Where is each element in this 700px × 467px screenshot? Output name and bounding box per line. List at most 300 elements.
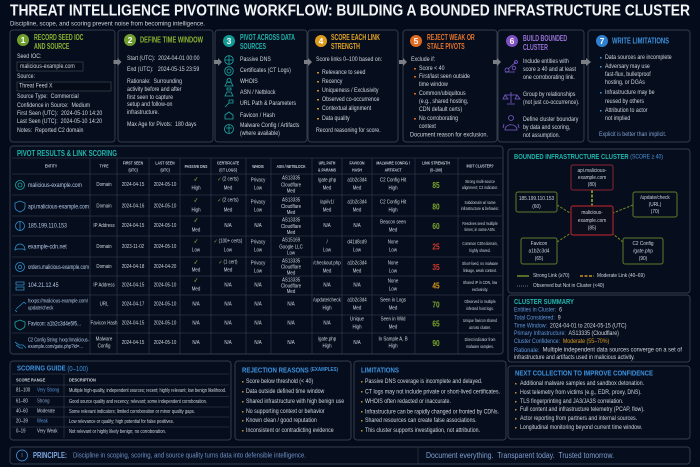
step 1 fields: malicious-example.com xyxy=(20,63,75,70)
table url and favicon columns: Med xyxy=(323,207,332,214)
limitations list: Shared resources can create false associations. xyxy=(365,418,477,424)
table whois and asn columns: Low xyxy=(254,185,262,192)
scoring table: SCORE RANGE xyxy=(16,377,45,383)
scoring table: Low relevance or quality; high potential for false positives. xyxy=(69,419,174,425)
table type and date columns: IP Address xyxy=(93,282,115,289)
scoring table grid xyxy=(12,374,229,438)
table url and favicon columns: Med xyxy=(353,268,362,275)
table passive dns and certificate columns: ✓ xyxy=(194,259,198,267)
step 1 fields: Confidence in Source: Medium xyxy=(17,103,90,109)
step 7 heading: WRITE LIMITATIONS xyxy=(612,36,669,46)
summary details: Entities in Cluster: 6 xyxy=(514,307,562,314)
table header row: (UTC) xyxy=(128,167,138,173)
table url and favicon columns: Med xyxy=(353,305,362,312)
table notes column: across cluster. xyxy=(469,326,491,330)
table entity names: update/check xyxy=(28,305,54,312)
table link strength scores xyxy=(432,181,440,348)
table whois and asn columns: Privacy xyxy=(251,177,266,184)
table link strength scores: 35 xyxy=(432,263,440,272)
step 3 heading: PIVOT ACROSS DATA xyxy=(240,34,295,42)
table entity names: 185.199.110.153 xyxy=(28,223,67,230)
table url and favicon columns xyxy=(313,177,367,350)
table whois and asn columns: Low xyxy=(254,247,262,254)
step 2 text: Start (UTC): 2024-04-01 00:00 xyxy=(127,56,200,62)
step 6 badge: 6 xyxy=(510,36,515,46)
table notes column: infected host logs. xyxy=(466,307,494,311)
step 4 list: Data quality xyxy=(322,116,350,122)
step 7 list: fast-flux, bulletproof xyxy=(605,72,651,78)
step 5 heading: REJECT WEAK OR xyxy=(427,34,475,42)
table link strength scores: 70 xyxy=(432,300,440,310)
step 3 list: Passive DNS xyxy=(240,57,271,63)
table passive dns and certificate columns: ✓ xyxy=(194,217,198,225)
table header row: (0–100) xyxy=(430,167,442,173)
table link strength scores: 65 xyxy=(432,319,440,329)
scoring table: Multiple high-quality, independent sources; recent; highly relevant; low benign likelihood. xyxy=(69,388,226,394)
scoring table: 61–80 xyxy=(16,398,28,405)
table url and favicon columns: Unique xyxy=(350,316,364,323)
step 4 list: Record reasoning for score. xyxy=(316,128,381,134)
summary details: Rationale: Multiple independent data sources converge on a set of xyxy=(514,346,682,354)
scoring table: 40–60 xyxy=(16,408,28,415)
step 5 list: context xyxy=(419,124,436,130)
step 6 text: Define cluster boundary xyxy=(523,117,578,123)
step 7 list: Data sources are incomplete xyxy=(605,55,672,61)
step 6 text xyxy=(523,59,580,139)
table type and date columns: 2023-11-02 xyxy=(122,244,144,250)
table link strength scores: 85 xyxy=(432,181,440,190)
table notes column: Subdomain w/ same xyxy=(464,201,496,205)
table header row: (UTC) xyxy=(160,167,170,173)
table type and date columns xyxy=(91,182,177,350)
cluster legend: Observed but Not in Cluster (<40) xyxy=(533,283,604,289)
table notes column: Direct indicator from xyxy=(465,338,495,342)
table entity names: 104.21.12.45 xyxy=(28,283,59,289)
table malware column: Beacon seen xyxy=(380,219,406,226)
table whois and asn columns: Cloudflare xyxy=(281,182,301,189)
table whois and asn columns: N/A xyxy=(254,282,262,289)
scoring table: 0–19 xyxy=(16,428,26,435)
step 1 fields xyxy=(17,54,111,134)
table whois and asn columns: Low xyxy=(287,250,295,257)
table notes column: Unique favicon shared xyxy=(463,319,497,323)
table notes column: times; in same ASN. xyxy=(465,228,495,232)
table passive dns and certificate columns xyxy=(191,176,243,346)
table url and favicon columns: Med xyxy=(323,185,332,192)
table type and date columns: Domain xyxy=(96,264,112,270)
step 4 list xyxy=(316,57,382,134)
table type and date columns: Domain xyxy=(96,203,112,210)
next collection list: Actor reporting from partners and internal sources. xyxy=(520,416,637,422)
summary details: Primary Infrastructure: AS13335 (Cloudflare) xyxy=(514,331,619,337)
table url and favicon columns: d41d8cd9 xyxy=(347,239,367,246)
table notes column: Observed in multiple xyxy=(464,300,496,304)
table grid xyxy=(12,158,502,354)
rejection list: Shared infrastructure with high benign use xyxy=(246,399,344,405)
table whois and asn columns: AS13335 xyxy=(282,258,300,265)
summary details xyxy=(514,307,682,361)
next collection list: Full content and infrastructure telemetry (PCAP, flow). xyxy=(520,407,645,413)
step 6 text: not assumption. xyxy=(523,133,560,139)
table whois and asn columns: N/A xyxy=(254,340,262,346)
table header row: LINK STRENGTH xyxy=(422,160,450,166)
table passive dns and certificate columns: Med xyxy=(192,286,201,293)
rejection list xyxy=(242,379,344,434)
step 2 text: setup and follow-on xyxy=(127,102,172,108)
table url and favicon columns: High xyxy=(322,343,332,350)
table header row: FAVICON xyxy=(350,160,364,166)
table malware column: Low xyxy=(389,268,397,275)
step 3 list: Favicon / Hash xyxy=(240,113,275,119)
table malware column: In Sample A, B xyxy=(378,336,408,343)
cluster heading: BOUNDED INFRASTRUCTURE CLUSTER (SCORE ≥ 40) xyxy=(514,152,663,161)
step 5 list: Document reason for exclusion. xyxy=(410,132,488,138)
step 4 list: Relevance to seed xyxy=(322,70,365,76)
step 6 text: one corroborating link. xyxy=(523,75,575,81)
table header row: ARTIFACT xyxy=(385,167,402,173)
limitations list: WHOIS often redacted or inaccurate. xyxy=(365,399,451,405)
step 3 heading xyxy=(240,34,295,51)
arrows between steps xyxy=(114,58,591,66)
table whois and asn columns: Privacy xyxy=(251,199,266,206)
step 3 list: URL Path & Parameters xyxy=(240,101,296,107)
rejection list: Known clean / good reputation xyxy=(246,418,317,424)
table type and date columns: 2024-04-20 xyxy=(154,264,177,270)
cluster nodes: Favicon xyxy=(531,241,547,247)
table header row: CERTIFICATE xyxy=(217,160,239,166)
step 5 list: First/last seen outside xyxy=(419,74,470,80)
scoring table: Good source quality and recency; relevant; some independent corroboration. xyxy=(69,399,207,405)
table url and favicon columns: a1b2c3d4 xyxy=(347,199,367,206)
table whois and asn columns: Low xyxy=(254,268,262,275)
step 2 heading: DEFINE TIME WINDOW xyxy=(140,36,203,44)
cluster links xyxy=(557,190,633,242)
step 5 heading xyxy=(427,34,475,51)
step 5 list: (e.g., shared hosting, xyxy=(419,99,469,105)
panel: rejection reasons xyxy=(235,361,351,440)
table whois and asn columns: Cloudflare xyxy=(281,204,301,210)
table type and date columns: Domain xyxy=(96,182,112,188)
panel: step 3 pivot sources xyxy=(215,30,307,142)
cluster nodes: (URL) xyxy=(649,202,662,208)
next collection list xyxy=(515,381,645,431)
rejection list: Inconsistent or contradicting evidence xyxy=(246,428,334,434)
table malware column xyxy=(378,177,408,350)
panel: step 4 score xyxy=(308,30,398,142)
rejection list: Score below threshold (< 40) xyxy=(246,379,313,385)
icon: info: i xyxy=(21,452,23,459)
table header row: MALWARE CONFIG / xyxy=(376,160,411,166)
step 5 list: CDN default certs) xyxy=(419,107,462,113)
table malware column: Med xyxy=(389,305,398,312)
table url and favicon columns: Low xyxy=(323,247,331,254)
summary details: Cluster Confidence: Moderate (55–70%) xyxy=(514,339,609,345)
table header row: ENTITY xyxy=(45,163,57,169)
table notes column: linkage, weak context. xyxy=(463,269,497,273)
table passive dns and certificate columns: ✓ (1 cert) xyxy=(219,259,238,266)
table header row xyxy=(45,160,494,173)
summary details: Total Considered: 9 xyxy=(514,315,561,322)
step 6 text: (not just co-occurrence). xyxy=(523,100,580,106)
table malware column: Seen in Wild xyxy=(381,316,406,323)
table header row: (CT LOGS) xyxy=(219,167,237,173)
table whois and asn columns: Med xyxy=(287,289,296,295)
step 1 fields: Last Seen (UTC): 2024-05-10 14:20 xyxy=(17,119,103,125)
table heading: PIVOT RESULTS & LINK SCORING xyxy=(17,149,117,158)
scoring table: Some relevant indicators; limited corroboration or minor quality gaps. xyxy=(69,409,195,415)
cluster nodes: C2 Config xyxy=(632,241,654,247)
step 3 list: Certificates (CT Logs) xyxy=(240,68,291,74)
cluster nodes: a1b2c3d4 xyxy=(529,248,549,255)
table type and date columns: Config xyxy=(98,343,111,350)
step 6 heading: CLUSTER xyxy=(523,44,548,52)
table type and date columns: 2024-04-15 xyxy=(122,320,145,327)
step 2 text xyxy=(127,56,200,128)
table link strength scores: 60 xyxy=(432,222,440,231)
table malware column: Med xyxy=(389,324,398,331)
table notes column: Common CDN domain, xyxy=(462,242,498,246)
table malware column: High xyxy=(388,185,398,192)
next collection heading: NEXT COLLECTION TO IMPROVE CONFIDENCE xyxy=(515,368,653,378)
table url and favicon columns: a1b2c3d4 xyxy=(347,297,367,304)
step 5 list: Exclude if: xyxy=(411,57,436,63)
icon: info xyxy=(16,450,28,461)
step 5 heading: STALE PIVOTS xyxy=(427,43,465,51)
table passive dns and certificate columns: High xyxy=(191,185,201,192)
step 5 list: No corroborating xyxy=(419,116,458,122)
panel: step 6 cluster xyxy=(498,30,584,142)
table whois and asn columns: Med xyxy=(287,210,296,216)
step 2 text: Max Age for Pivots: 180 days xyxy=(127,122,196,128)
table entity names: C2 Config String: hxxp://malicious- xyxy=(28,338,89,344)
step 6 text: by data and scoring, xyxy=(523,125,571,131)
table entity icons xyxy=(15,180,26,348)
scoring table: DESCRIPTION xyxy=(69,377,96,383)
summary details: infrastructure and artifacts used in malicious activity. xyxy=(514,355,635,361)
panel: scoring guide xyxy=(10,361,231,440)
table malware column: High xyxy=(388,207,398,214)
step 3 list xyxy=(240,57,299,137)
table url and favicon columns: a1b2c3d4 xyxy=(347,177,367,184)
table url and favicon columns: N/A xyxy=(353,340,361,346)
step 2 text: first seen to capture xyxy=(127,95,173,101)
next collection list: TLS fingerprinting and JA3/JA3S correlation. xyxy=(520,399,624,405)
step 1 heading: RECORD SEED IOC xyxy=(34,34,84,42)
cluster nodes: /update/check xyxy=(640,195,670,201)
table passive dns and certificate columns: High xyxy=(191,207,201,214)
table malware column: Low xyxy=(389,247,397,254)
table type and date columns: 2024-04-15 xyxy=(122,282,145,289)
scoring table: Very Weak xyxy=(37,428,58,435)
table entity names: example-cdn.net xyxy=(28,244,67,251)
table url and favicon columns: / xyxy=(326,239,328,246)
table passive dns and certificate columns: Med xyxy=(224,185,233,192)
table url and favicon columns: /update/check xyxy=(313,297,341,304)
limitations list xyxy=(361,379,500,434)
next collection list: Longitudinal monitoring beyond current time window. xyxy=(520,425,642,431)
step 5 list: time window xyxy=(419,82,449,88)
table notes column: infrastructure & behavior. xyxy=(461,207,499,211)
table type and date columns: 2024-04-18 xyxy=(122,264,145,270)
step 4 badge: 4 xyxy=(319,36,324,46)
table notes column: Shared IP in CDN, low xyxy=(463,281,497,285)
limitations list: This cluster supports investigation, not attribution. xyxy=(365,428,480,434)
table malware column: C2 Config Hit xyxy=(380,177,407,184)
principle text: Discipline in scoping, scoring, and source quality turns data into defensible intelligence. xyxy=(73,452,306,460)
step 3 list: ASN / Netblock xyxy=(240,90,276,96)
scoring heading: SCORING GUIDE (0–100) xyxy=(17,364,88,372)
table notes column: Short-lived, no malware xyxy=(462,262,498,266)
table entity names: example.com/gate.php?id=... xyxy=(28,344,83,350)
cluster nodes: example.com xyxy=(578,175,607,181)
cluster nodes xyxy=(516,165,677,264)
table whois and asn columns: Med xyxy=(287,188,296,195)
panel: cluster summary xyxy=(508,295,690,362)
table whois and asn columns: AS13335 xyxy=(282,175,300,182)
cluster nodes: malicious- xyxy=(581,210,603,216)
table header row: FIRST SEEN xyxy=(123,160,143,166)
table malware column: None xyxy=(388,278,399,285)
step 6 text: Group by relationships xyxy=(523,92,576,98)
step 3 list: (where available) xyxy=(240,131,280,137)
table passive dns and certificate columns: N/A xyxy=(224,282,232,289)
cluster legend: Strong Link (≥70) xyxy=(533,273,570,279)
table header row: WHOIS xyxy=(252,164,264,169)
table url and favicon columns: N/A xyxy=(323,320,331,327)
table notes column: Strong multi-source xyxy=(465,180,495,184)
step 3 icons xyxy=(224,56,234,134)
table type and date columns: 2024-04-15 xyxy=(122,223,145,229)
limitations list: CT logs may not include private or short-lived certificates. xyxy=(365,388,500,396)
scoring table xyxy=(16,377,226,435)
step 7 list: Infrastructure may be xyxy=(605,90,655,96)
table whois and asn columns xyxy=(251,175,303,346)
rejection heading: REJECTION REASONS (EXAMPLES) xyxy=(242,366,338,374)
table type and date columns: IP Address xyxy=(93,223,115,229)
table whois and asn columns: Med xyxy=(287,270,296,277)
table passive dns and certificate columns: Low xyxy=(224,247,232,254)
table malware column: Seen in Logs xyxy=(380,297,406,304)
cluster nodes: (85) xyxy=(588,225,596,232)
table whois and asn columns: Privacy xyxy=(251,260,266,267)
step 6 heading xyxy=(523,35,567,52)
table passive dns and certificate columns: Med xyxy=(224,207,233,214)
rejection list: No supporting context or behavior xyxy=(246,409,325,415)
table entity names: api.malicious-example.com xyxy=(28,204,89,210)
table whois and asn columns: AS13335 xyxy=(282,217,300,224)
table url and favicon columns: N/A xyxy=(323,282,331,289)
scoring table: Very Strong xyxy=(37,387,60,394)
table url and favicon columns: N/A xyxy=(353,223,361,229)
table header row: PASSIVE DNS xyxy=(185,164,208,169)
step 7 list: reused by others xyxy=(605,99,644,105)
cluster nodes: /gate.php xyxy=(633,248,653,255)
table whois and asn columns: Google LLC xyxy=(279,244,303,251)
step 4 list: Recency xyxy=(322,79,342,85)
table type and date columns: Domain xyxy=(96,244,112,250)
step 1 heading: AND SOURCE xyxy=(34,43,70,51)
table notes column: malware samples. xyxy=(466,345,494,349)
panel: limitations xyxy=(354,361,506,440)
step 6 text: score ≥ 40 and at least xyxy=(523,67,576,73)
cluster nodes: (60) xyxy=(532,204,541,210)
table type and date columns: 2024-05-10 xyxy=(154,320,177,327)
step 4 list: Contextual alignment xyxy=(322,106,372,112)
principle label: PRINCIPLE: xyxy=(33,451,67,460)
table url and favicon columns: High xyxy=(322,305,332,312)
table link strength scores: 25 xyxy=(432,242,440,252)
step 4 list: Observed co-occurrence xyxy=(322,97,379,103)
table passive dns and certificate columns: N/A xyxy=(224,340,232,346)
limitations list: Passive DNS coverage is incomplete and delayed. xyxy=(365,379,483,385)
step 5 list: Score < 40 xyxy=(419,66,445,72)
table notes column: Resolves seed multiple xyxy=(462,222,498,226)
table whois and asn columns: Cloudflare xyxy=(281,224,301,230)
table url and favicon columns: Med xyxy=(353,207,362,214)
step 6 icons xyxy=(503,60,520,130)
table header row: LAST SEEN xyxy=(155,160,175,166)
step 4 list: Uniqueness / Exclusivity xyxy=(322,88,379,94)
scoring table: 20–39 xyxy=(16,418,28,425)
subtitle: Discipline, scope, and scoring prevent noise from becoming intelligence. xyxy=(10,20,205,28)
next collection list: Additional malware samples and sandbox detonation. xyxy=(520,381,644,387)
table type and date columns: 2024-05-10 xyxy=(154,282,177,289)
step 5 list: Common/ubiquitous xyxy=(419,91,466,97)
table link strength scores: 45 xyxy=(432,281,440,291)
table malware column: None xyxy=(388,260,399,267)
step 2 badge: 2 xyxy=(128,35,133,45)
table url and favicon columns: a1b2c3d4 xyxy=(347,260,367,267)
cluster nodes: 185.199.110.153 xyxy=(519,196,554,202)
step 6 text: Include entities with xyxy=(523,59,569,65)
cluster nodes: (70) xyxy=(651,209,659,215)
step 3 list: WHOIS xyxy=(240,79,258,85)
next collection list: Host telemetry from victims (e.g., EDR, proxy, DNS). xyxy=(520,390,642,396)
table url and favicon columns: Med xyxy=(353,185,362,192)
table passive dns and certificate columns: N/A xyxy=(224,223,232,229)
table malware column: Med xyxy=(389,227,398,234)
table url and favicon columns: N/A xyxy=(323,223,331,229)
table header row: HASH xyxy=(352,167,362,173)
step 4 heading: SCORE EACH LINK xyxy=(331,34,380,42)
table entity names: orders.malicious-example.com xyxy=(28,264,89,271)
table passive dns and certificate columns: Med xyxy=(192,227,201,234)
table passive dns and certificate columns: ✓ (2 certs) xyxy=(217,197,239,204)
table notes column xyxy=(461,180,499,349)
step 4 heading: STRENGTH xyxy=(331,43,360,51)
table malware column: High xyxy=(388,343,398,350)
table entity names: hxxps://malicious-example.com/ xyxy=(28,298,88,304)
step 1 fields: First Seen (UTC): 2024-05-10 14:20 xyxy=(17,111,103,117)
table malware column: Low xyxy=(389,286,397,293)
scoring table: Strong xyxy=(37,398,50,405)
step 7 list xyxy=(599,55,672,138)
step 2 text: infrastructure. xyxy=(127,110,159,116)
table entity names xyxy=(28,182,89,350)
table passive dns and certificate columns: N/A xyxy=(192,320,200,327)
step 7 list: Adversary may use xyxy=(605,64,650,70)
table header row: INDT CLUSTER? xyxy=(466,163,494,169)
table header row: TYPE xyxy=(100,163,109,169)
step 1 fields: Threat Feed X xyxy=(19,83,53,90)
table url and favicon columns: /api/v1/ xyxy=(320,199,335,206)
step 4 list: Score links 0–100 based on: xyxy=(316,57,382,63)
table notes column: alignment; C2 indicator. xyxy=(462,186,498,190)
step 1 fields: Source Type: Commercial xyxy=(17,94,79,100)
table passive dns and certificate columns: Med xyxy=(224,267,233,274)
rejection list: Data outside defined time window xyxy=(246,389,325,395)
table entity names: Favicon: a1b2c3d4e5f6... xyxy=(28,320,81,328)
